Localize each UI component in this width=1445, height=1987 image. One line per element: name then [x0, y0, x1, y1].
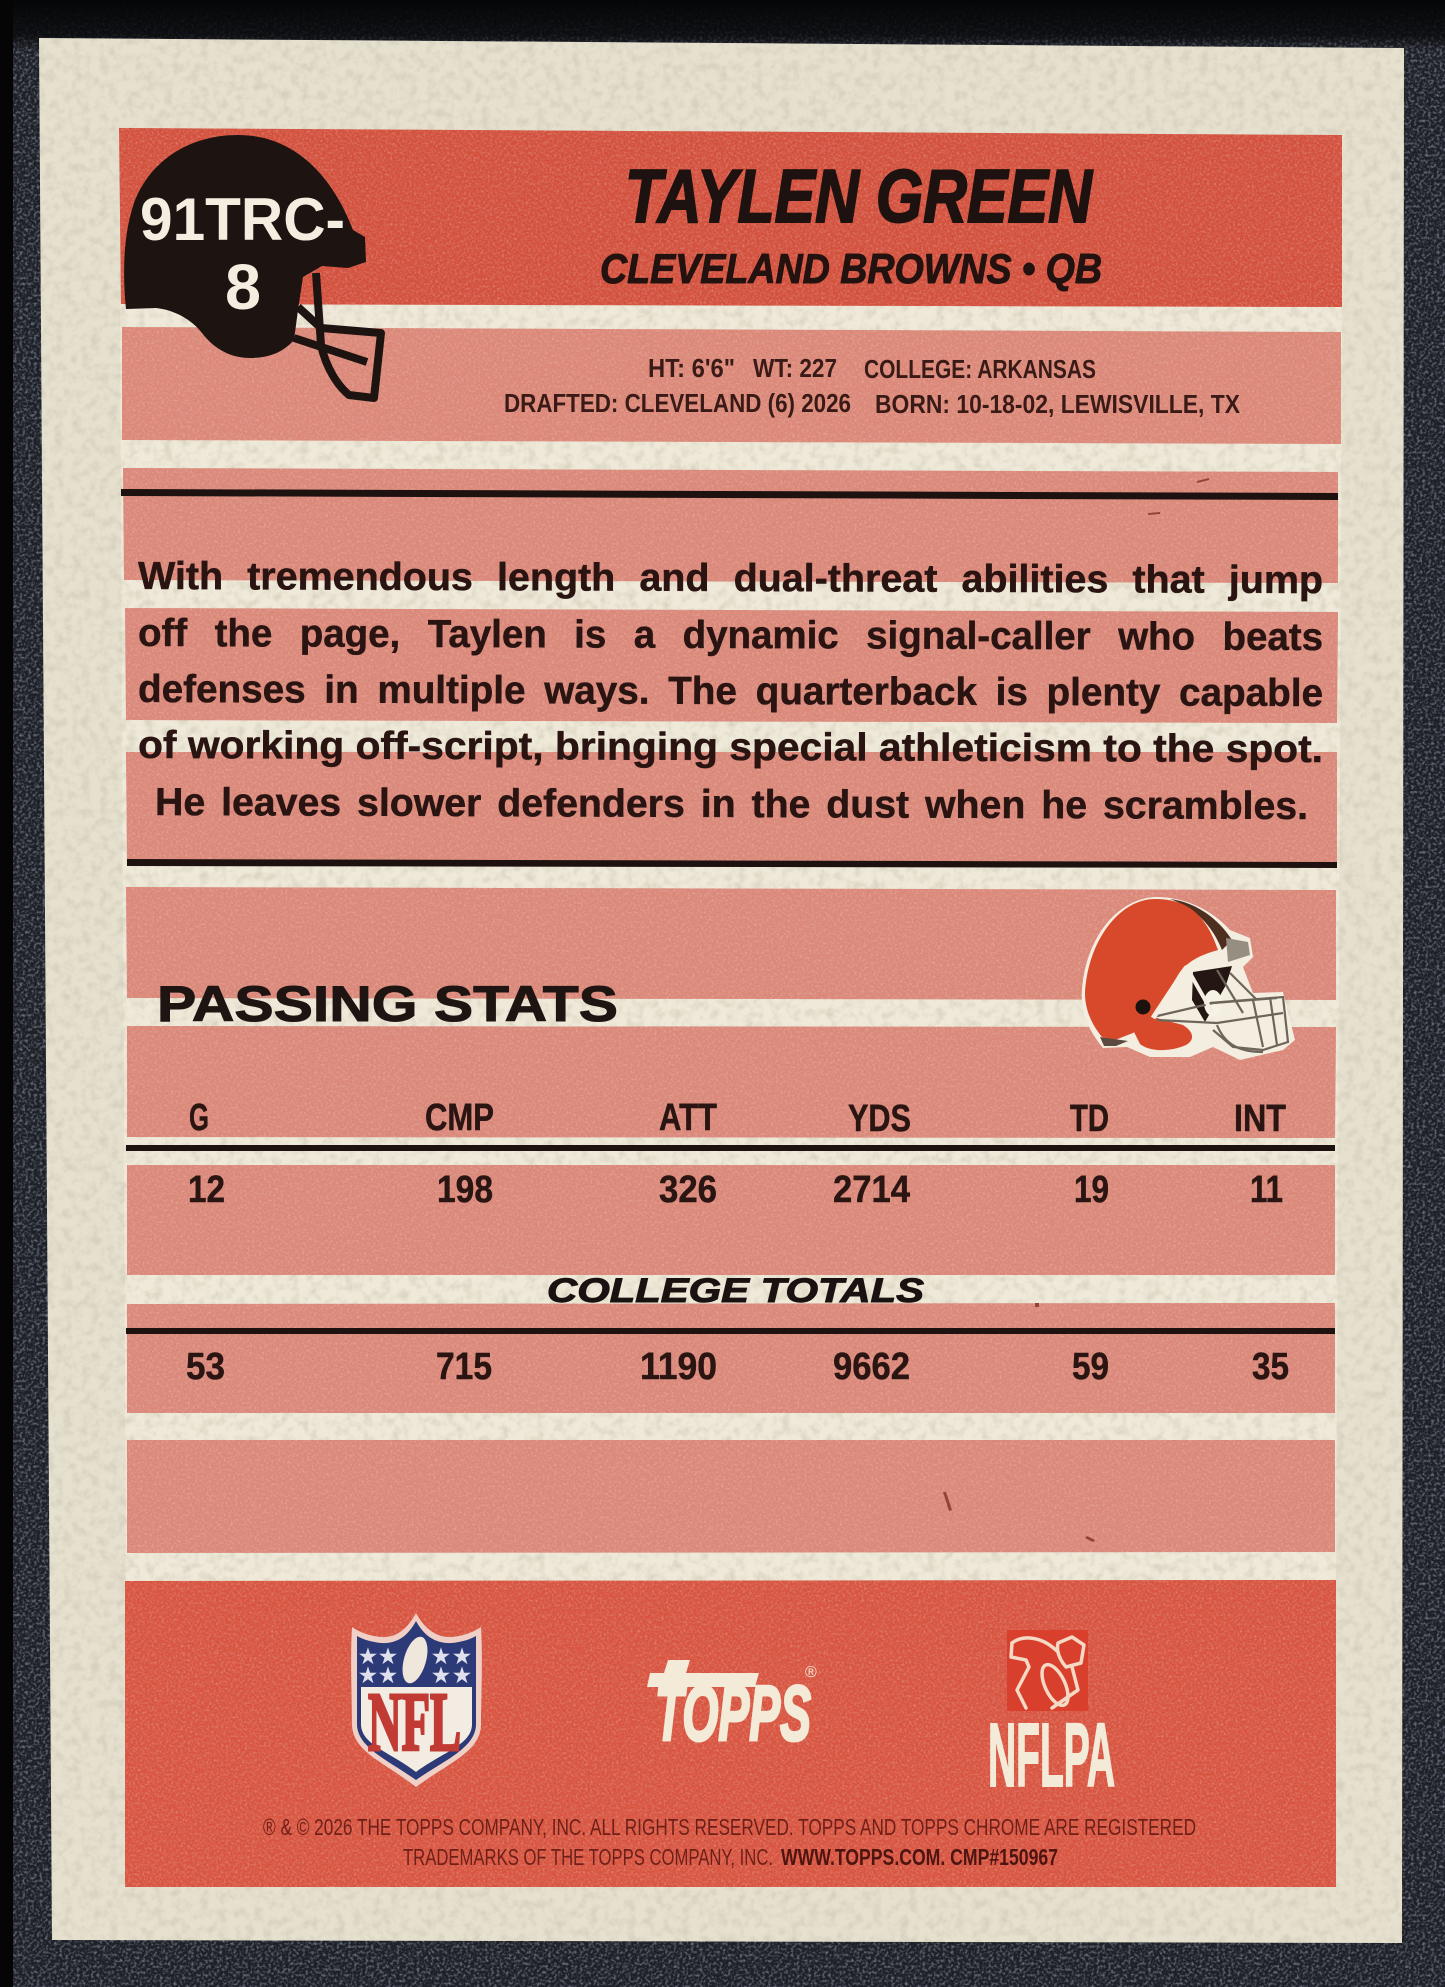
- text: draft and birth: BORN: 10-18-02, LEWISVILLE, TX: [875, 389, 1241, 419]
- divider: bio bottom rule: [127, 859, 1337, 868]
- text: NFLPA: [988, 1706, 1115, 1806]
- text: draft and birth: [504, 388, 1241, 419]
- text block: player bio: of working off-script, bringing special athleticism to the spot.: [138, 724, 1323, 771]
- season row: 11: [1250, 1169, 1283, 1211]
- panel: stats stripe 3: [127, 1165, 1335, 1275]
- panel: stats stripe 4: [127, 1303, 1335, 1413]
- season row: [188, 1169, 1283, 1211]
- panel: bio stripe 1: [123, 468, 1338, 583]
- season row: 2714: [833, 1169, 910, 1211]
- text: draft and birth: DRAFTED: CLEVELAND (6) 2026: [504, 388, 851, 418]
- card number line 1: 91TRC-: [140, 186, 345, 253]
- text: height, weight, college: COLLEGE: ARKANSAS: [864, 354, 1096, 384]
- icon: Topps logo: TOPPS: [655, 1669, 811, 1757]
- icon: NFL shield: ★: [359, 1646, 377, 1668]
- icon: NFL shield: ★: [432, 1646, 450, 1668]
- panel: stats stripe 1: [126, 887, 1336, 1000]
- text block: player bio: [138, 555, 1323, 828]
- totals row: 9662: [833, 1346, 910, 1388]
- season row: 12: [188, 1169, 225, 1211]
- season row: 19: [1074, 1169, 1109, 1211]
- totals row: 1190: [640, 1346, 717, 1388]
- column headers: TD: [1070, 1098, 1109, 1140]
- season row: 198: [437, 1169, 493, 1211]
- text: height, weight, college: WT: 227: [753, 353, 837, 383]
- text block: player bio: He leaves slower defenders in the dust when he scrambles.: [155, 781, 1308, 828]
- subtitle: team and position: CLEVELAND BROWNS • QB: [600, 245, 1102, 293]
- icon: Cleveland Browns helmet: [1082, 897, 1295, 1060]
- wordmark: NFL: NFL: [368, 1676, 461, 1769]
- icon: NFL shield: ★: [432, 1665, 450, 1687]
- totals row: 53: [186, 1346, 225, 1388]
- text: height, weight, college: HT: 6'6": [648, 353, 735, 383]
- icon: NFL shield: ★: [379, 1646, 397, 1668]
- text: copyright line 2: TRADEMARKS OF THE TOPPS COMPANY, INC.: [403, 1844, 773, 1870]
- title: player name: TAYLEN GREEN: [625, 154, 1093, 238]
- season row: 326: [659, 1169, 717, 1211]
- panel: name banner: [119, 128, 1342, 307]
- icon: NFL shield: ★: [379, 1665, 397, 1687]
- column headers: [189, 1097, 1286, 1140]
- panel: stats stripe 2: [127, 1026, 1336, 1138]
- column headers: INT: [1234, 1098, 1286, 1140]
- column headers: G: [189, 1097, 209, 1139]
- column headers: YDS: [848, 1098, 911, 1140]
- heading: college totals: COLLEGE TOTALS: [547, 1272, 924, 1310]
- icon: Topps logo: [647, 1660, 817, 1757]
- registered mark: ®: [805, 1664, 817, 1681]
- panel: vitals band: [122, 327, 1341, 444]
- column headers: ATT: [659, 1097, 717, 1139]
- panel: bio stripe 2: [125, 608, 1338, 723]
- table: passing stats: [126, 1097, 1335, 1388]
- totals row: 59: [1072, 1346, 1109, 1388]
- text: website and code: WWW.TOPPS.COM. CMP#150967: [781, 1844, 1058, 1870]
- text block: player bio: With tremendous length and dual-threat abilities that jump: [138, 555, 1323, 602]
- icon: NFL shield: [351, 1613, 482, 1787]
- panel: empty stripe: [127, 1440, 1335, 1553]
- text block: player bio: defenses in multiple ways. The quarterback is plenty capable: [138, 668, 1323, 715]
- totals row: 715: [436, 1346, 492, 1388]
- panel: bio stripe 3: [126, 752, 1337, 866]
- icon: black helmet with card number: [124, 135, 381, 398]
- heading: passing stats: PASSING STATS: [157, 976, 618, 1032]
- column headers: CMP: [425, 1097, 494, 1139]
- icon: NFL shield: ★: [453, 1665, 471, 1687]
- text block: player bio: off the page, Taylen is a dynamic signal-caller who beats: [138, 612, 1323, 659]
- totals row: 35: [1252, 1346, 1289, 1388]
- totals row: [186, 1346, 1289, 1388]
- icon: NFLPA logo: [988, 1630, 1115, 1806]
- text: height, weight, college: [648, 353, 1096, 384]
- icon: NFL shield: ★: [359, 1665, 377, 1687]
- divider: bio top rule: [121, 489, 1338, 500]
- card number line 2: 8: [225, 251, 261, 323]
- icon: NFL shield: ★: [453, 1646, 471, 1668]
- panel: logo footer: [125, 1580, 1336, 1887]
